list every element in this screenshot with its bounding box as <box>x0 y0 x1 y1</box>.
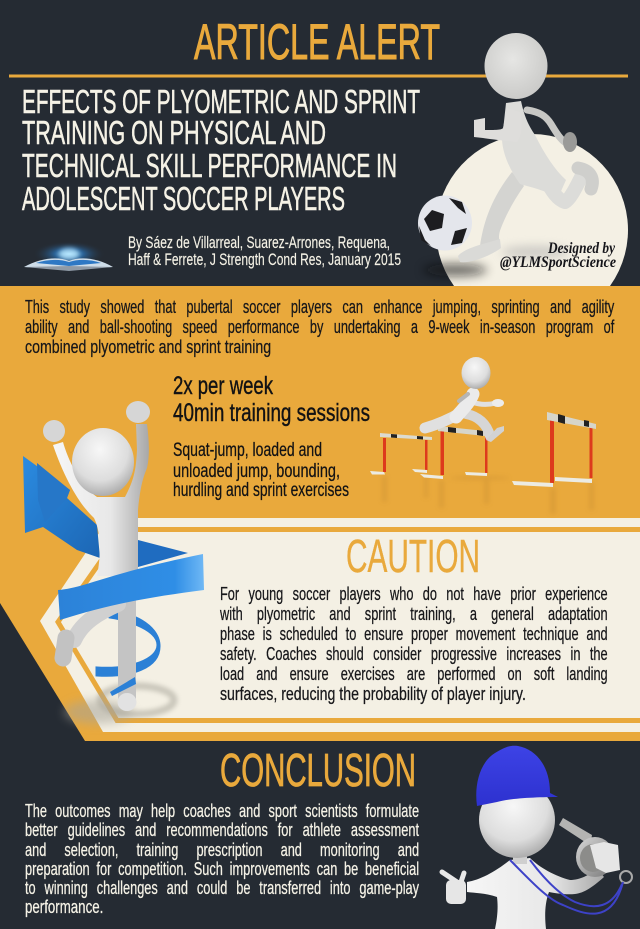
article heading: TRAINING ON PHYSICAL AND <box>22 114 326 151</box>
figure: coach with whistle <box>442 746 632 929</box>
conclusion paragraph: The outcomes may help coaches and sport scientists formulate <box>25 801 419 821</box>
exercise list: unloaded jump, bounding, <box>173 461 340 482</box>
conclusion paragraph <box>25 801 420 918</box>
caution paragraph <box>220 584 608 704</box>
intro paragraph: This study showed that pubertal soccer players can enhance jumping, sprinting and agility <box>25 297 614 317</box>
article heading: EFFECTS OF PLYOMETRIC AND SPRINT <box>22 83 420 120</box>
citation: By Sáez de Villarreal, Suarez-Arrones, Requena, <box>128 234 390 252</box>
hurdles <box>370 412 596 487</box>
caution paragraph: For young soccer players who do not have prior experience <box>220 584 608 604</box>
caution heading: CAUTION <box>346 530 480 582</box>
citation: Haff & Ferrete, J Strength Cond Res, January 2015 <box>128 251 401 269</box>
hurdle reflections <box>382 474 594 514</box>
conclusion paragraph: and selection, training prescription and monitoring and <box>25 840 419 860</box>
header rule <box>9 74 628 78</box>
intro paragraph: combined plyometric and sprint training <box>25 337 271 357</box>
intro paragraph: ability and ball-shooting speed performance by undertaking a 9-week in-season program of <box>25 317 614 337</box>
exercise list: Squat-jump, loaded and <box>173 440 322 461</box>
article heading <box>22 83 420 217</box>
icon: open book <box>24 241 113 271</box>
cream caution panel <box>40 518 640 732</box>
caution paragraph: surfaces, reducing the probability of player injury. <box>220 684 526 704</box>
conclusion paragraph: better guidelines and recommendations for athlete assessment <box>25 820 419 840</box>
training frequency: 2x per week <box>173 372 273 400</box>
title: ARTICLE ALERT <box>194 14 440 70</box>
caution panel inner stripe <box>58 530 640 720</box>
designer credit <box>500 240 616 271</box>
designer credit: Designed by <box>547 240 616 257</box>
conclusion paragraph: preparation for competition. Such improvements can be beneficial <box>25 859 419 879</box>
conclusion paragraph: to winning challenges and could be transferred into game-play <box>25 878 419 898</box>
figure: running player <box>423 33 592 276</box>
article heading: ADOLESCENT SOCCER PLAYERS <box>22 180 345 217</box>
article heading: TECHNICAL SKILL PERFORMANCE IN <box>22 147 397 184</box>
caution paragraph: phase is scheduled to ensure proper movement technique and <box>220 624 608 644</box>
icon: soccer ball <box>418 196 472 250</box>
training frequency <box>173 372 370 427</box>
training frequency: 40min training sessions <box>173 399 370 427</box>
exercise list <box>173 440 349 501</box>
figure: cheering person with blue arrow <box>23 401 204 724</box>
designer credit: @YLMSportScience <box>500 254 616 271</box>
conclusion paragraph: performance. <box>25 897 103 917</box>
figure: hurdling jumper <box>425 357 504 442</box>
orange middle panel <box>0 286 640 741</box>
caution paragraph: with plyometric and sprint training, a general adaptation <box>220 604 608 624</box>
intro paragraph <box>25 297 614 358</box>
exercise list: hurdling and sprint exercises <box>173 480 349 501</box>
conclusion heading: CONCLUSION <box>220 744 416 796</box>
citation <box>128 234 401 269</box>
cream circle behind player <box>436 134 628 286</box>
caution paragraph: load and ensure exercises are performed on soft landing <box>220 664 608 684</box>
caution paragraph: safety. Coaches should consider progressive increases in the <box>220 644 608 664</box>
